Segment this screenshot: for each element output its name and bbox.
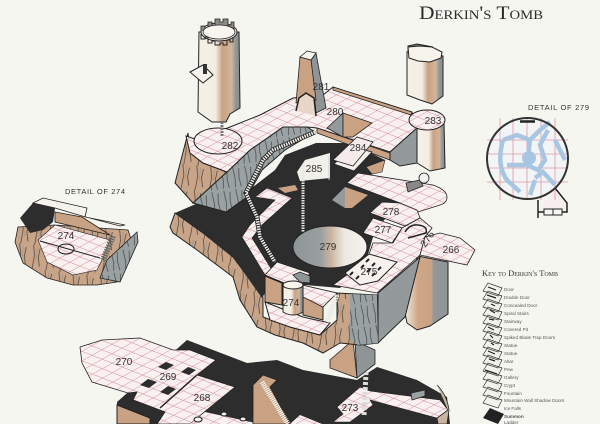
entry stub bbox=[538, 188, 567, 218]
ruined tower 283 bbox=[407, 44, 443, 104]
bottom stairs band bbox=[262, 382, 288, 424]
key label: Altar bbox=[504, 359, 514, 364]
stair outline bbox=[246, 132, 315, 262]
upper plate bbox=[333, 137, 373, 166]
front crenellations bbox=[201, 34, 233, 45]
label 266: 266 bbox=[443, 245, 460, 256]
key label: Stairway bbox=[504, 319, 522, 324]
tower 274 top bbox=[283, 281, 303, 289]
walkway left bbox=[242, 188, 292, 275]
loop corridor 276 bbox=[405, 225, 426, 238]
bottom corridor floor bbox=[190, 412, 260, 424]
label 276: 276 bbox=[419, 229, 437, 250]
cliff grey bbox=[100, 232, 138, 282]
wall block right bbox=[303, 296, 323, 320]
key label: Spiked Blade Trap Doors bbox=[504, 335, 556, 340]
grey cliff face right bbox=[378, 257, 420, 343]
label 275: 275 bbox=[361, 267, 378, 278]
grey lower cliff bbox=[350, 294, 378, 345]
orb bbox=[419, 173, 429, 183]
circular dark ring white room 285 bbox=[297, 153, 330, 181]
key icons bbox=[483, 283, 502, 408]
wall top bbox=[33, 198, 125, 226]
stone block bbox=[293, 272, 310, 283]
rear crenellations bbox=[201, 19, 234, 31]
detail of 274 bbox=[15, 187, 138, 285]
obelisk cap bbox=[300, 51, 316, 60]
vertical stairs bbox=[302, 165, 304, 232]
column tan face bbox=[330, 340, 357, 378]
label 278: 278 bbox=[383, 207, 400, 218]
grey wedge bbox=[390, 128, 417, 166]
key bbox=[482, 268, 565, 424]
label 273: 273 bbox=[342, 403, 359, 414]
key label: Mountain Wall Shadow Doors bbox=[504, 398, 565, 403]
pit right bbox=[345, 187, 368, 208]
falling stair column bbox=[364, 372, 366, 416]
lower island brown cliff bbox=[170, 213, 378, 353]
pit right face bbox=[343, 113, 372, 137]
circle map bbox=[487, 118, 568, 199]
room 278 bbox=[370, 202, 420, 226]
side balcony bbox=[190, 65, 213, 83]
pillars in room 269 bbox=[140, 362, 196, 395]
curved end of corridor bbox=[437, 385, 449, 424]
lower level dark ground bbox=[117, 340, 450, 424]
ruin top bbox=[408, 46, 442, 62]
support column below island bbox=[330, 340, 375, 378]
central island bbox=[170, 51, 475, 353]
top wall ledge bbox=[333, 87, 412, 115]
obelisk tan face bbox=[296, 57, 316, 103]
balcony door bbox=[203, 64, 207, 74]
obelisk grey face bbox=[311, 53, 326, 113]
label 281: 281 bbox=[313, 82, 330, 93]
tan wall bbox=[55, 212, 110, 235]
obelisk door frame bbox=[296, 93, 316, 116]
detail of 279 bbox=[487, 103, 589, 218]
column grey face bbox=[355, 341, 375, 378]
label 269: 269 bbox=[160, 372, 177, 383]
central blue blob bbox=[522, 151, 536, 165]
label 270: 270 bbox=[116, 357, 133, 368]
key label: Ice Falls bbox=[504, 406, 522, 411]
top floor pit bbox=[327, 113, 372, 137]
circle outline bbox=[487, 118, 568, 199]
tower stair bbox=[220, 122, 224, 137]
label 274: 274 bbox=[58, 231, 75, 242]
key label: Concealed Door bbox=[504, 303, 538, 308]
top grey cliff bbox=[193, 127, 315, 212]
blue caverns bbox=[500, 122, 565, 195]
lower plate bbox=[334, 147, 372, 171]
dark interior bbox=[175, 143, 400, 298]
corridor line bbox=[40, 241, 100, 258]
label 268: 268 bbox=[194, 393, 211, 404]
label 284: 284 bbox=[350, 143, 367, 154]
detail 279 heading: DETAIL OF 279 bbox=[528, 103, 589, 112]
long corridor floor bbox=[347, 173, 447, 212]
bottom stair block bbox=[253, 375, 290, 424]
lower floors bbox=[265, 262, 337, 335]
key label: Fountain bbox=[504, 391, 522, 396]
label 279: 279 bbox=[320, 242, 337, 253]
wing 266 bbox=[420, 233, 475, 265]
pit left bbox=[332, 187, 345, 208]
key label: Crypt bbox=[504, 383, 516, 388]
top door bbox=[520, 120, 535, 123]
bridge plates 284 bbox=[333, 137, 373, 171]
ruin body bbox=[407, 52, 443, 104]
stairs by wall bbox=[327, 295, 337, 322]
main floor bbox=[333, 218, 432, 293]
cliff brown bbox=[15, 225, 133, 285]
corridor pit bbox=[332, 187, 368, 208]
circle grid bbox=[487, 118, 568, 200]
floor bbox=[38, 225, 110, 275]
title: Derkin's Tomb bbox=[419, 3, 543, 24]
stair rungs bbox=[246, 132, 315, 262]
label 283: 283 bbox=[425, 116, 442, 127]
entry doors bbox=[544, 209, 562, 215]
rock debris bbox=[366, 160, 385, 174]
crypts marks 275 bbox=[350, 259, 381, 279]
key label: Summon bbox=[504, 414, 524, 419]
bottom dungeon level bbox=[80, 338, 450, 424]
upper courtyard floor bbox=[265, 262, 337, 298]
pit left face bbox=[327, 113, 343, 137]
label 280: 280 bbox=[327, 107, 344, 118]
top floor bbox=[186, 87, 417, 172]
detail 274 heading: DETAIL OF 274 bbox=[65, 187, 125, 196]
tower 283 base bbox=[417, 122, 445, 171]
lower level tan wall bbox=[117, 405, 150, 424]
pit 279 bbox=[293, 226, 367, 268]
room 268 divider bbox=[160, 375, 197, 408]
key label: Pew bbox=[504, 367, 514, 372]
room 273 floor bbox=[333, 387, 448, 422]
key label: Statue bbox=[504, 343, 518, 348]
ruin rim bbox=[408, 44, 433, 52]
black key icon bbox=[483, 408, 504, 424]
key label: Covered Pit bbox=[504, 327, 529, 332]
bottom floor segment bbox=[290, 415, 322, 424]
left tower 282 bbox=[190, 19, 240, 137]
key labels bbox=[504, 287, 565, 424]
dark pit bbox=[20, 203, 55, 233]
key label: Gallery bbox=[504, 375, 519, 380]
key label: Door bbox=[504, 287, 514, 292]
device box bbox=[406, 180, 423, 192]
stairs bbox=[103, 236, 113, 260]
connecting floor bbox=[302, 285, 337, 307]
key label: Spiral Stairs bbox=[504, 311, 529, 316]
tower body bbox=[198, 32, 240, 122]
pipe icon bbox=[411, 390, 425, 400]
label 282: 282 bbox=[222, 141, 239, 152]
lower courtyard floor bbox=[265, 302, 330, 335]
door marks bbox=[194, 412, 246, 422]
rooms grid 275 bbox=[345, 254, 397, 285]
key label: Statue bbox=[504, 351, 518, 356]
top left brown cliff bbox=[175, 133, 227, 203]
right support tower bbox=[405, 256, 448, 330]
inner opening bbox=[203, 25, 235, 39]
label 277: 277 bbox=[375, 225, 392, 236]
number labels main island bbox=[222, 82, 460, 309]
tower 274 bbox=[283, 285, 303, 315]
circular room 283 bbox=[409, 110, 445, 130]
orb device bbox=[406, 173, 429, 192]
key heading: Key to Derkin's Tomb bbox=[482, 268, 558, 278]
lower ledge bbox=[317, 128, 390, 160]
long spiral stairs bbox=[246, 132, 315, 262]
circular chamber bbox=[58, 244, 74, 254]
key icon marks bbox=[485, 287, 497, 374]
tower top opening bbox=[201, 23, 237, 41]
circular room 282 bbox=[194, 128, 242, 154]
room 270 floor bbox=[80, 338, 235, 424]
obelisk 281 bbox=[296, 51, 326, 116]
label 274: 274 bbox=[283, 298, 300, 309]
sword pointer bbox=[328, 156, 330, 180]
wall block left bbox=[265, 276, 282, 305]
label 285: 285 bbox=[306, 164, 323, 175]
rock debris 2 bbox=[278, 185, 298, 193]
room 277 bbox=[363, 218, 402, 243]
key label: Double Door bbox=[504, 295, 530, 300]
